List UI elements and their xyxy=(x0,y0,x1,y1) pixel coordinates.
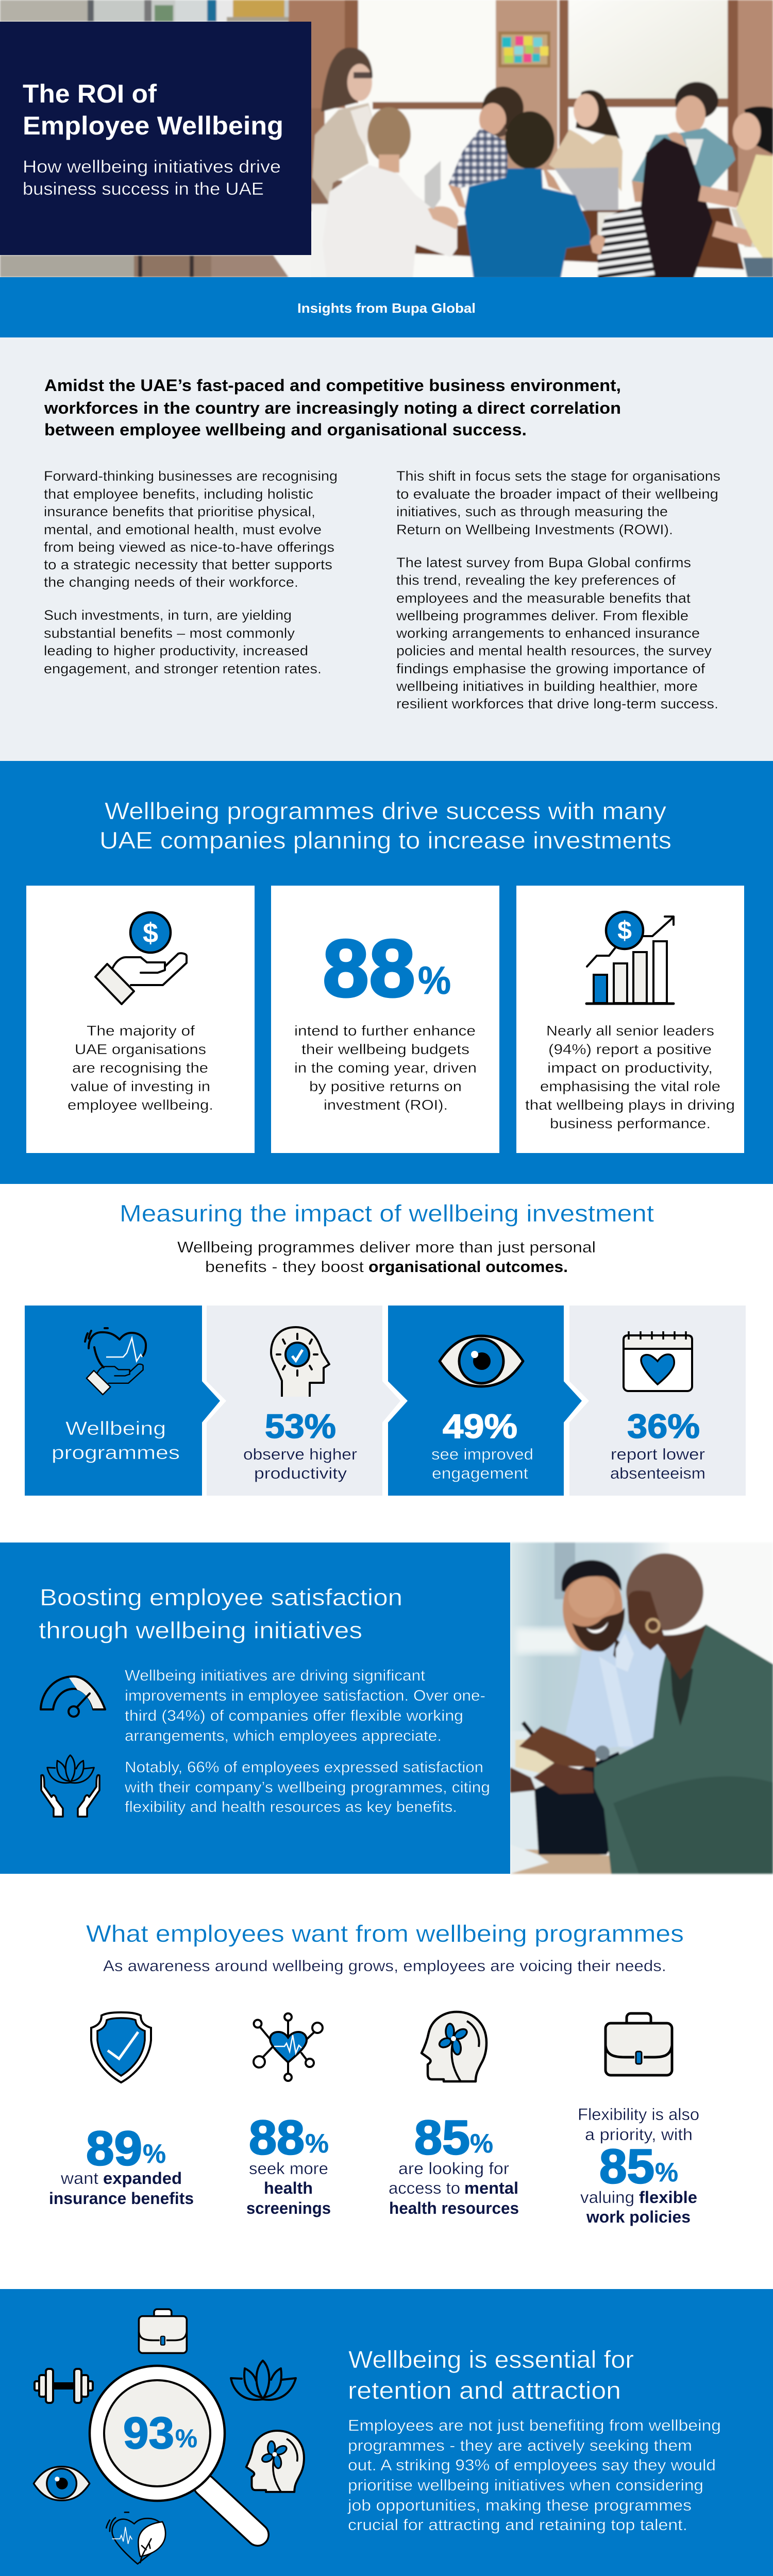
icon: magnifying glass with 93% xyxy=(90,2366,258,2535)
paragraph: 66% satisfaction xyxy=(124,1759,490,1816)
caption xyxy=(243,1445,357,1482)
heading: UAE companies planning to increase investments xyxy=(99,827,671,854)
text column right: initiatives, such as through measuring the xyxy=(396,504,668,519)
card text: that wellbeing plays in driving xyxy=(525,1097,735,1113)
column: insurance benefits xyxy=(49,2012,194,2208)
icon: shield with check xyxy=(91,2012,151,2082)
statistic 89%: % xyxy=(143,2139,166,2169)
photo: team meeting hero xyxy=(0,0,773,278)
paragraph: 66% satisfaction: flexibility and health resources as key benefits. xyxy=(125,1799,457,1816)
caption xyxy=(389,2159,519,2217)
icon: head with flower xyxy=(246,2431,304,2492)
paragraph: 66% satisfaction: with their company’s wellbeing programmes, citing xyxy=(124,1779,490,1796)
text column right: The latest survey from Bupa Global confirms xyxy=(396,555,691,570)
statistic 36%: 36% xyxy=(627,1407,700,1445)
statistic 85% xyxy=(599,2139,678,2193)
intro statement xyxy=(44,376,621,439)
statistic 85%: 85 xyxy=(599,2139,654,2193)
statistic 89%: 89 xyxy=(86,2121,142,2175)
intro statement: between employee wellbeing and organisational success. xyxy=(44,420,527,439)
paragraph: satisfaction improvements: improvements in employee satisfaction. Over one- xyxy=(125,1687,485,1704)
panel: measuring the impact xyxy=(25,1200,746,1496)
statistic 88%: 88 xyxy=(323,923,415,1014)
man in blue sweater xyxy=(505,111,554,169)
caption: screenings xyxy=(246,2199,331,2217)
caption xyxy=(246,2159,331,2217)
icon: heart network xyxy=(254,2013,323,2081)
caption: are looking for xyxy=(398,2159,509,2178)
man in denim xyxy=(675,82,718,119)
paragraph: programmes - they are actively seeking them xyxy=(348,2436,692,2454)
statistic 85%: 85 xyxy=(414,2110,470,2164)
text column left: engagement, and stronger retention rates. xyxy=(44,661,322,676)
statistic 49%: 49% xyxy=(443,1407,517,1445)
caption xyxy=(49,2169,194,2208)
column: health screenings xyxy=(246,2013,331,2217)
heading: Wellbeing is essential for xyxy=(348,2346,634,2373)
left laptop xyxy=(425,161,441,209)
smiling woman xyxy=(576,90,620,139)
text column right: working arrangements to enhanced insurance xyxy=(396,625,700,641)
paragraph: satisfaction improvements xyxy=(125,1667,485,1744)
statistic 93%: % xyxy=(175,2424,197,2453)
text column right: Return on Wellbeing Investments (ROWI). xyxy=(396,522,673,537)
woman in stripes xyxy=(598,204,682,278)
text column right: wellbeing programmes deliver. From flexible xyxy=(396,608,688,623)
panel: retention and attraction xyxy=(0,2289,773,2576)
lead-in text: a priority, with xyxy=(585,2125,693,2144)
caption: health xyxy=(264,2179,313,2197)
statistic 93% xyxy=(123,2409,197,2458)
intro statement: Amidst the UAE’s fast-paced and competitive business environment, xyxy=(44,376,621,395)
statistic 93%: 93 xyxy=(123,2409,174,2458)
text column left: substantial benefits – most commonly xyxy=(44,625,295,641)
card text: in the coming year, driven xyxy=(294,1060,477,1076)
statistic 85%: % xyxy=(655,2158,678,2188)
icon: eye xyxy=(33,2467,90,2500)
statistic 88% xyxy=(249,2110,329,2164)
bearded man plaid xyxy=(482,87,524,130)
subheading: benefits - they boost xyxy=(205,1258,364,1276)
statistic 85%: % xyxy=(470,2129,493,2159)
icon: lotus xyxy=(231,2361,296,2400)
man xyxy=(534,1752,639,1855)
card text: value of investing in xyxy=(71,1078,210,1094)
woman on the right xyxy=(700,193,753,240)
card text: impact on productivity, xyxy=(547,1060,713,1076)
icon: heart and leaf xyxy=(106,2512,165,2564)
card text: are recognising the xyxy=(72,1060,208,1076)
panel: wellbeing programmes drive success xyxy=(0,761,773,1184)
heading: Wellbeing programmes drive success with many xyxy=(105,798,666,824)
table xyxy=(413,208,744,269)
icon: briefcase xyxy=(606,2013,672,2075)
subheading: organisational outcomes. xyxy=(368,1258,568,1276)
caption: productivity xyxy=(254,1464,347,1482)
subtitle: business success in the UAE xyxy=(23,179,264,199)
caption: absenteeism xyxy=(610,1464,705,1482)
standing woman xyxy=(321,47,373,112)
label xyxy=(52,1418,180,1463)
panel: what employees want xyxy=(49,1920,699,2226)
paragraph: crucial for attracting and retaining top talent. xyxy=(348,2516,687,2534)
hands and notebook xyxy=(515,1739,562,1778)
statistic 88%: 88 xyxy=(249,2110,305,2164)
icon: rising bars and coin: $ xyxy=(617,916,632,945)
caption: access to xyxy=(389,2179,460,2197)
heading: through wellbeing initiatives xyxy=(39,1617,362,1643)
caption: seek more xyxy=(249,2159,328,2178)
text column left: the changing needs of their workforce. xyxy=(44,574,298,590)
title: The ROI of xyxy=(23,79,157,108)
icon: gauge xyxy=(41,1676,105,1717)
caption: expanded xyxy=(103,2169,182,2188)
text column right: this trend, revealing the key preferences of xyxy=(396,572,676,588)
caption: work policies xyxy=(586,2208,691,2226)
caption: report lower xyxy=(611,1445,705,1463)
chevron: lower absenteeism xyxy=(569,1306,746,1496)
text column right xyxy=(396,468,720,711)
caption: health resources xyxy=(389,2199,519,2217)
card text xyxy=(525,1023,735,1131)
card text: their wellbeing budgets xyxy=(301,1041,469,1057)
icon: heart in hand xyxy=(85,1328,146,1395)
icon: hand holding coin xyxy=(95,912,187,1004)
caption: flexible xyxy=(639,2188,697,2207)
heading xyxy=(39,1584,402,1643)
caption: see improved xyxy=(431,1445,533,1463)
chevron: higher productivity xyxy=(207,1306,400,1496)
subtitle xyxy=(23,157,281,199)
centre laptop xyxy=(554,167,618,210)
card text: UAE organisations xyxy=(75,1041,206,1057)
text column right: resilient workforces that drive long-term success. xyxy=(396,696,718,711)
subheading: Wellbeing programmes deliver more than just personal xyxy=(177,1238,596,1256)
banner: insights from Bupa Global: Insights from Bupa Global xyxy=(297,300,476,316)
card text: The majority of xyxy=(87,1023,195,1039)
text column right: employees and the measurable benefits that xyxy=(396,590,691,606)
icon: hand holding coin: $ xyxy=(143,918,158,948)
card text: business performance. xyxy=(550,1115,711,1131)
title xyxy=(23,79,283,140)
caption: mental xyxy=(464,2179,518,2197)
chevron: improved engagement xyxy=(388,1306,582,1496)
blond man xyxy=(367,107,411,163)
heading xyxy=(99,798,671,854)
paragraph: Employees are not just benefiting from wellbeing xyxy=(348,2416,721,2434)
label: Wellbeing xyxy=(65,1418,166,1439)
heading: What employees want from wellbeing programmes xyxy=(86,1920,684,1947)
panel: boosting employee satisfaction xyxy=(0,1543,510,1874)
card text xyxy=(68,1023,213,1113)
woman xyxy=(594,1624,773,1874)
heading: Boosting employee satisfaction xyxy=(40,1584,402,1611)
caption: want xyxy=(60,2169,98,2188)
statistic 89% xyxy=(86,2121,166,2175)
paragraph: job opportunities, making these programmes xyxy=(347,2496,692,2514)
icon: calendar with heart xyxy=(624,1331,692,1391)
card: majority of organisations xyxy=(26,886,255,1153)
caption xyxy=(431,1445,533,1482)
text column left: from being viewed as nice-to-have offerings xyxy=(44,539,334,555)
text column right: This shift in focus sets the stage for organisations xyxy=(396,468,720,484)
card text: investment (ROI). xyxy=(324,1097,448,1113)
text column left: Forward-thinking businesses are recognising xyxy=(44,468,338,484)
title: Employee Wellbeing xyxy=(23,111,283,140)
card: senior leaders xyxy=(516,886,744,1153)
paragraph: out. A striking 93% of employees say they would xyxy=(348,2456,716,2474)
paragraph: satisfaction improvements: Wellbeing initiatives are driving significant xyxy=(125,1667,426,1684)
card text: (94%) report a positive xyxy=(548,1041,712,1057)
caption: insurance benefits xyxy=(49,2189,194,2208)
statistic 85% xyxy=(414,2110,493,2164)
icon: briefcase xyxy=(139,2309,187,2353)
text column left xyxy=(44,468,338,676)
icon: head with check xyxy=(271,1327,329,1397)
photo: two colleagues talking xyxy=(510,1543,773,1874)
text column right: to evaluate the broader impact of their wellbeing xyxy=(396,486,718,502)
paragraph: satisfaction improvements: arrangements, which employees appreciate. xyxy=(125,1727,442,1744)
paragraph: prioritise wellbeing initiatives when considering xyxy=(348,2476,703,2494)
heading xyxy=(348,2346,634,2404)
caption: observe higher xyxy=(243,1445,357,1463)
text column left: to a strategic necessity that better supports xyxy=(44,557,332,572)
lead-in text: Flexibility is also xyxy=(578,2105,699,2124)
card: 88% xyxy=(271,886,499,1153)
icon: rising bars and coin xyxy=(586,912,674,1004)
subtitle: How wellbeing initiatives drive xyxy=(23,157,281,177)
text column left: mental, and emotional health, must evolve xyxy=(44,522,322,537)
icon: eye xyxy=(440,1336,523,1386)
text column left: Such investments, in turn, are yielding xyxy=(44,607,292,623)
panel: introduction xyxy=(0,337,773,761)
text column right: policies and mental health resources, the survey xyxy=(396,643,712,658)
card text xyxy=(294,1023,477,1113)
cork board xyxy=(498,31,550,67)
icon: dumbbell xyxy=(35,2369,93,2403)
text column right: wellbeing initiatives in building healthier, more xyxy=(396,679,698,694)
paragraph: satisfaction improvements: third (34%) of companies offer flexible working xyxy=(125,1707,463,1724)
statistic 88%: % xyxy=(418,959,451,1003)
text column left: insurance benefits that prioritise physical, xyxy=(44,504,315,519)
caption: engagement xyxy=(432,1464,528,1482)
subheading: As awareness around wellbeing grows, employees are voicing their needs. xyxy=(103,1957,666,1975)
card text: emphasising the vital role xyxy=(540,1078,720,1094)
card text: employee wellbeing. xyxy=(68,1097,213,1113)
card text: Nearly all senior leaders xyxy=(546,1023,714,1039)
text column right: findings emphasise the growing importance of xyxy=(396,661,705,676)
banner: insights from Bupa Global xyxy=(0,277,773,337)
caption xyxy=(610,1445,705,1482)
heading: Measuring the impact of wellbeing investment xyxy=(120,1200,654,1227)
title panel xyxy=(0,22,311,255)
paragraph xyxy=(347,2416,721,2534)
text column left: that employee benefits, including holistic xyxy=(44,486,313,502)
caption: valuing xyxy=(580,2188,634,2207)
icon: hands holding lotus xyxy=(41,1755,99,1817)
chevron: wellbeing programmes xyxy=(25,1306,220,1496)
intro statement: workforces in the country are increasingly noting a direct correlation xyxy=(44,399,621,417)
paragraph: 66% satisfaction: Notably, 66% of employees expressed satisfaction xyxy=(125,1759,483,1776)
card text: by positive returns on xyxy=(309,1078,462,1094)
card text: intend to further enhance xyxy=(294,1023,476,1039)
text column left: leading to higher productivity, increased xyxy=(44,643,308,658)
lead-in text xyxy=(578,2105,699,2144)
table xyxy=(510,1850,665,1874)
subheading xyxy=(177,1238,596,1276)
column: mental health resources xyxy=(389,2012,519,2217)
statistic 88%: % xyxy=(305,2129,329,2159)
column: flexible work policies xyxy=(578,2013,699,2226)
heading: retention and attraction xyxy=(348,2377,621,2404)
statistic 53%: 53% xyxy=(265,1407,336,1445)
icon: head with flower xyxy=(422,2012,486,2081)
label: programmes xyxy=(52,1442,180,1463)
caption xyxy=(580,2188,697,2226)
